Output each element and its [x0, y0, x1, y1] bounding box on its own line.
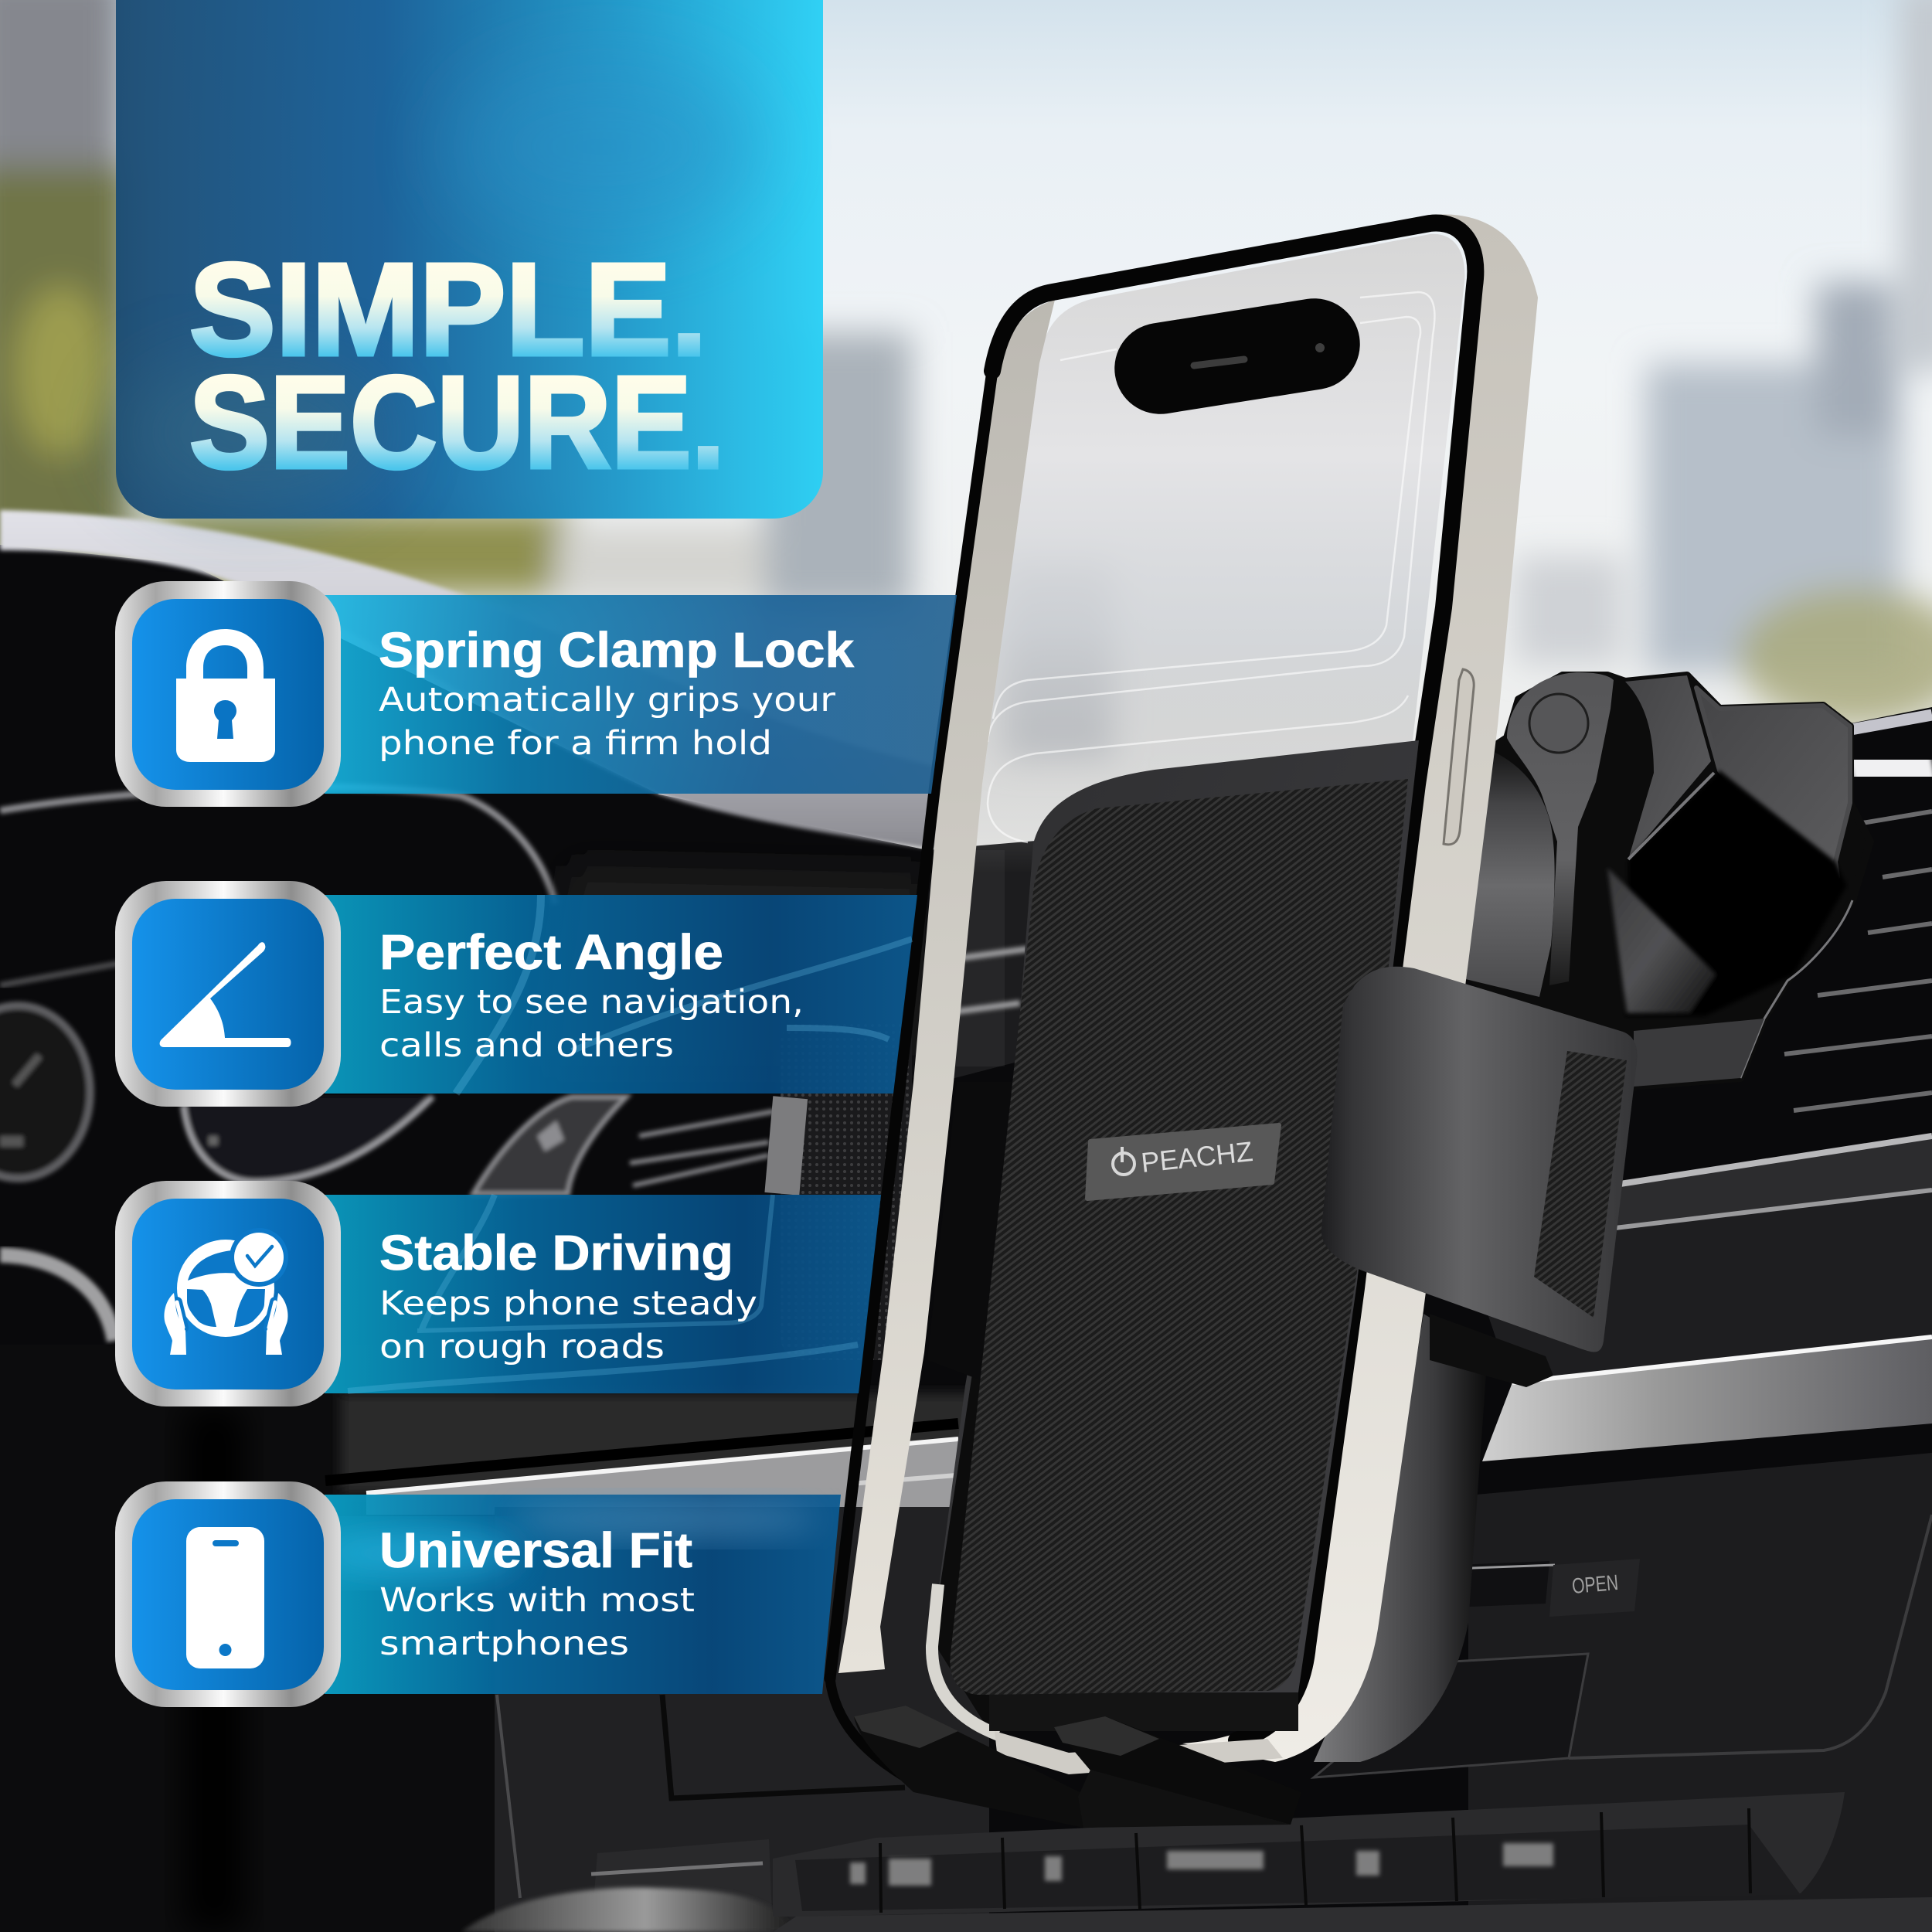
feature text: Automatically grips your: [379, 681, 835, 719]
mount: pivot knob: [1507, 672, 1614, 985]
feature text: [379, 924, 804, 1065]
feature text: Stable Driving: [379, 1225, 733, 1281]
dash: upper trim strip: [325, 1423, 974, 1515]
feature text: on rough roads: [379, 1328, 665, 1366]
feature text: Easy to see navigation,: [379, 983, 804, 1022]
dash: vent wing behind phone: [764, 1020, 912, 1360]
OPEN button: OPEN: [1571, 1570, 1619, 1598]
title: SIMPLE. SECURE.: SECURE.: [189, 349, 725, 496]
feature text: Works with most: [379, 1581, 695, 1620]
banner: [325, 1195, 881, 1393]
feature: Perfect Angle: [115, 881, 917, 1107]
panel: headline: [116, 0, 823, 519]
phone: right-side bracket: [1314, 1314, 1488, 1762]
clamp: fabric strip: [1534, 1051, 1627, 1318]
badge: angle icon: [115, 881, 341, 1107]
holder: backplate: [927, 740, 1419, 1774]
phone: side button: [1444, 669, 1474, 845]
mount: lower facet: [1607, 868, 1716, 1013]
mount: base plate: [1634, 1019, 1764, 1087]
dash: lower centre console: [461, 1507, 989, 1932]
feature text: Universal Fit: [379, 1522, 692, 1578]
phone: left inner silver edge: [838, 300, 1055, 1673]
vents: bright slats: [1851, 715, 1932, 730]
title: SIMPLE. SECURE.: SIMPLE.: [189, 236, 707, 383]
banner: [325, 1495, 841, 1694]
mount: rear bracket: [1625, 675, 1711, 859]
OPEN button: [1549, 1559, 1640, 1617]
phone: notch: [1108, 292, 1366, 420]
phone: black bezel: [830, 223, 1475, 1785]
banner streaks: [348, 1195, 858, 1391]
dash: centre gauge: [183, 1097, 433, 1182]
dash: left gauge: [0, 1005, 90, 1179]
phone: screen contour lines: [988, 292, 1434, 842]
dashboard: right side panels, trim strips and vents: [773, 715, 1932, 1932]
logo badge: PEACHZ: [1087, 1125, 1279, 1199]
badge: steering wheel icon: [115, 1181, 341, 1406]
phone: [830, 214, 1538, 1785]
dashboard: dark base and silver hood: [0, 510, 1932, 1932]
dash: paddle: [473, 1097, 627, 1194]
feature: Universal Fit: [115, 1481, 841, 1707]
badge: lock icon: [115, 581, 341, 807]
phone: glass screen: [940, 234, 1464, 1082]
feature text: [379, 622, 854, 763]
feature: Stable Driving: [115, 1181, 881, 1406]
feature text: Keeps phone steady: [379, 1284, 757, 1323]
holder: bottom support feet: [854, 1706, 1301, 1828]
title: SIMPLE. SECURE.: [189, 236, 725, 496]
mount: upper wing: [1696, 688, 1850, 877]
banner: [325, 895, 917, 1094]
mount: cube face: [1625, 770, 1847, 1016]
background: blurred city and sky: [0, 0, 1932, 927]
feature text: Perfect Angle: [379, 924, 723, 980]
phone mount: vent clip and ball joint: [1453, 672, 1870, 1087]
feature text: [379, 1522, 695, 1663]
mount: dark silhouette: [1468, 675, 1870, 1087]
feature text: Spring Clamp Lock: [379, 622, 854, 678]
bottom button row: [773, 1792, 1932, 1932]
feature text: calls and others: [379, 1026, 674, 1065]
feature text: phone for a firm hold: [379, 724, 772, 763]
feature text: smartphones: [379, 1624, 629, 1663]
feature text: [379, 1225, 757, 1366]
mount: connector arm: [1453, 750, 1555, 997]
holder: fabric pad: [950, 779, 1408, 1695]
banner streaks: [456, 895, 912, 1094]
feature: Spring Clamp Lock: [115, 581, 957, 807]
logo badge: PEACHZ: PEACHZ: [1140, 1135, 1254, 1179]
phone: right silver edge: [1182, 214, 1538, 1762]
badge: phone icon: [115, 1481, 341, 1707]
dash: steering wheel rim: [0, 1255, 114, 1341]
banner: [325, 595, 957, 794]
holder: side clamp arm: [1321, 967, 1638, 1387]
